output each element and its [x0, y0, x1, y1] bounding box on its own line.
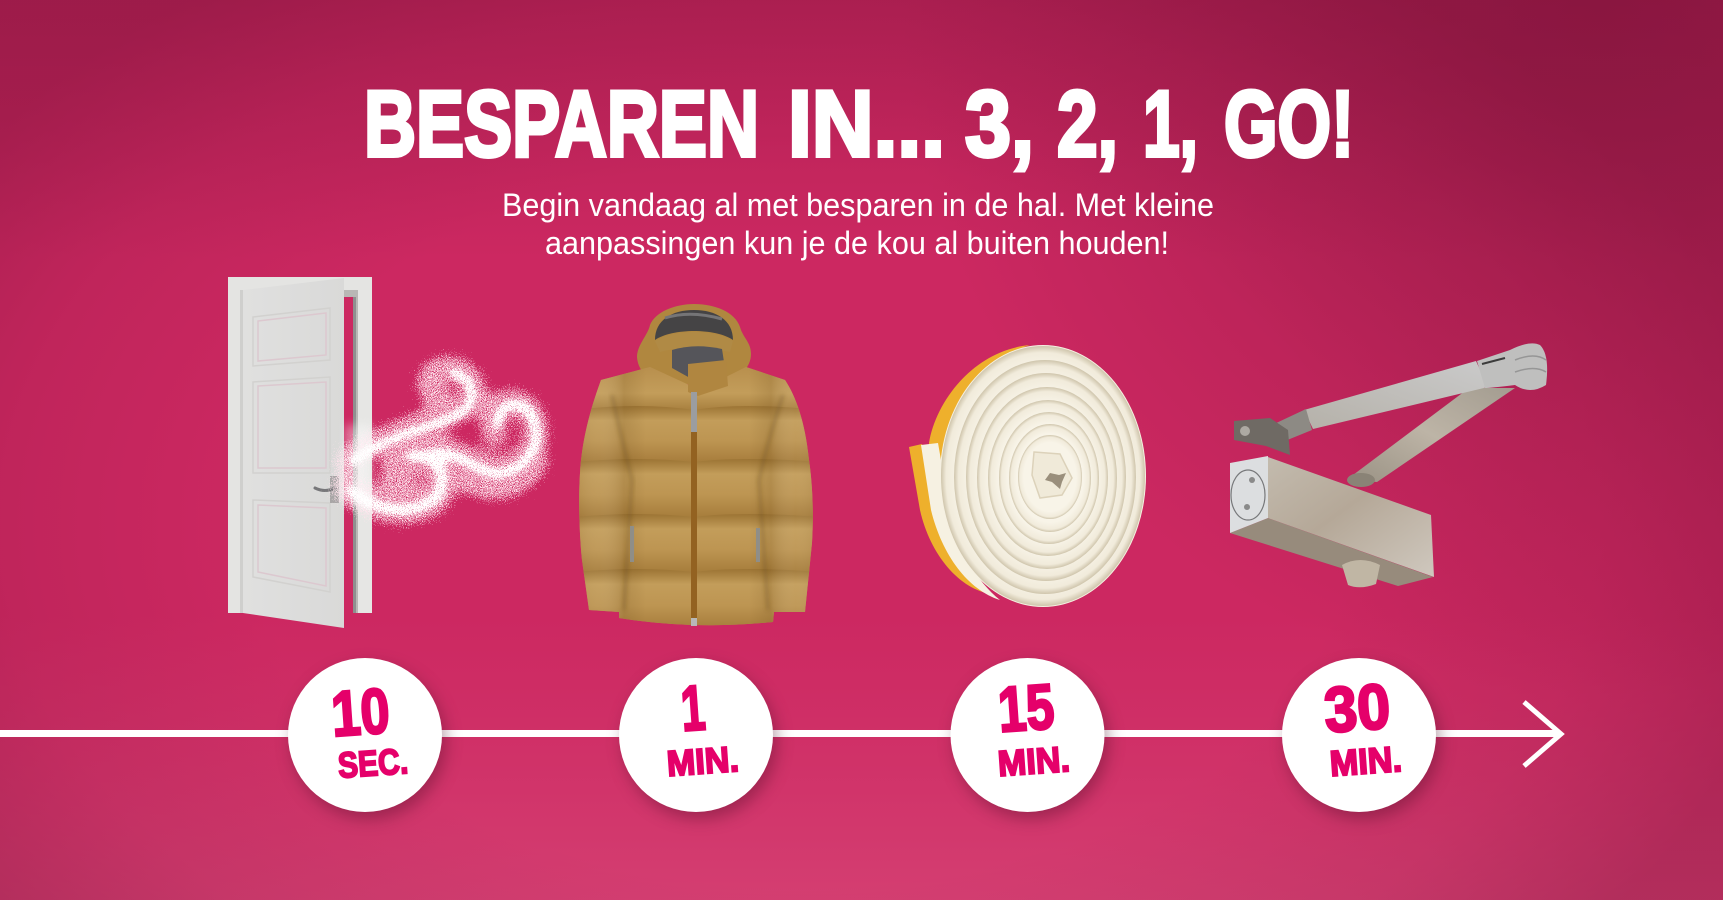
arm	[1349, 388, 1515, 482]
title: IN...	[788, 71, 945, 176]
title: BESPAREN	[364, 71, 759, 176]
marker: 15 min: 15	[996, 670, 1057, 746]
subtitle: Begin vandaag al met besparen in de hal. Met kleine	[502, 187, 1214, 223]
valve	[1342, 560, 1380, 587]
icon: air swirl	[345, 368, 540, 512]
icon: foam seal roll	[909, 345, 1146, 607]
title: 2,	[1057, 71, 1118, 176]
subtitle: aanpassingen kun je de kou al buiten houden!	[545, 225, 1169, 261]
marker: 30 min: 30	[1322, 670, 1393, 746]
pockets	[630, 526, 760, 562]
icon: puffer jacket	[575, 304, 820, 630]
subtitle	[502, 187, 1214, 261]
title: 3,	[965, 71, 1034, 176]
title: 1,	[1143, 71, 1198, 176]
marker: 15 min	[950, 658, 1104, 812]
timeline line	[0, 730, 1558, 737]
marker: 1 min: MIN.	[665, 738, 740, 784]
marker: 10 sec: 10	[329, 674, 392, 750]
collar	[688, 360, 728, 396]
hub	[1477, 343, 1547, 390]
hood	[637, 304, 751, 384]
box	[1230, 518, 1433, 586]
marker: 15 min: MIN.	[996, 738, 1071, 784]
title: GO!	[1224, 71, 1354, 176]
icon: door closer	[1230, 343, 1547, 587]
marker: 30 min: MIN.	[1328, 738, 1403, 784]
zipper	[691, 392, 697, 626]
arrow head	[1524, 702, 1561, 766]
title	[364, 71, 1354, 176]
jacket body	[575, 365, 820, 630]
marker: 10 sec	[288, 658, 442, 812]
marker: 10 sec: SEC.	[337, 740, 409, 786]
marker: 30 min	[1282, 658, 1436, 812]
marker: 1 min: 1	[679, 671, 708, 745]
icon: open door	[228, 277, 372, 628]
marker: 1 min	[619, 658, 773, 812]
